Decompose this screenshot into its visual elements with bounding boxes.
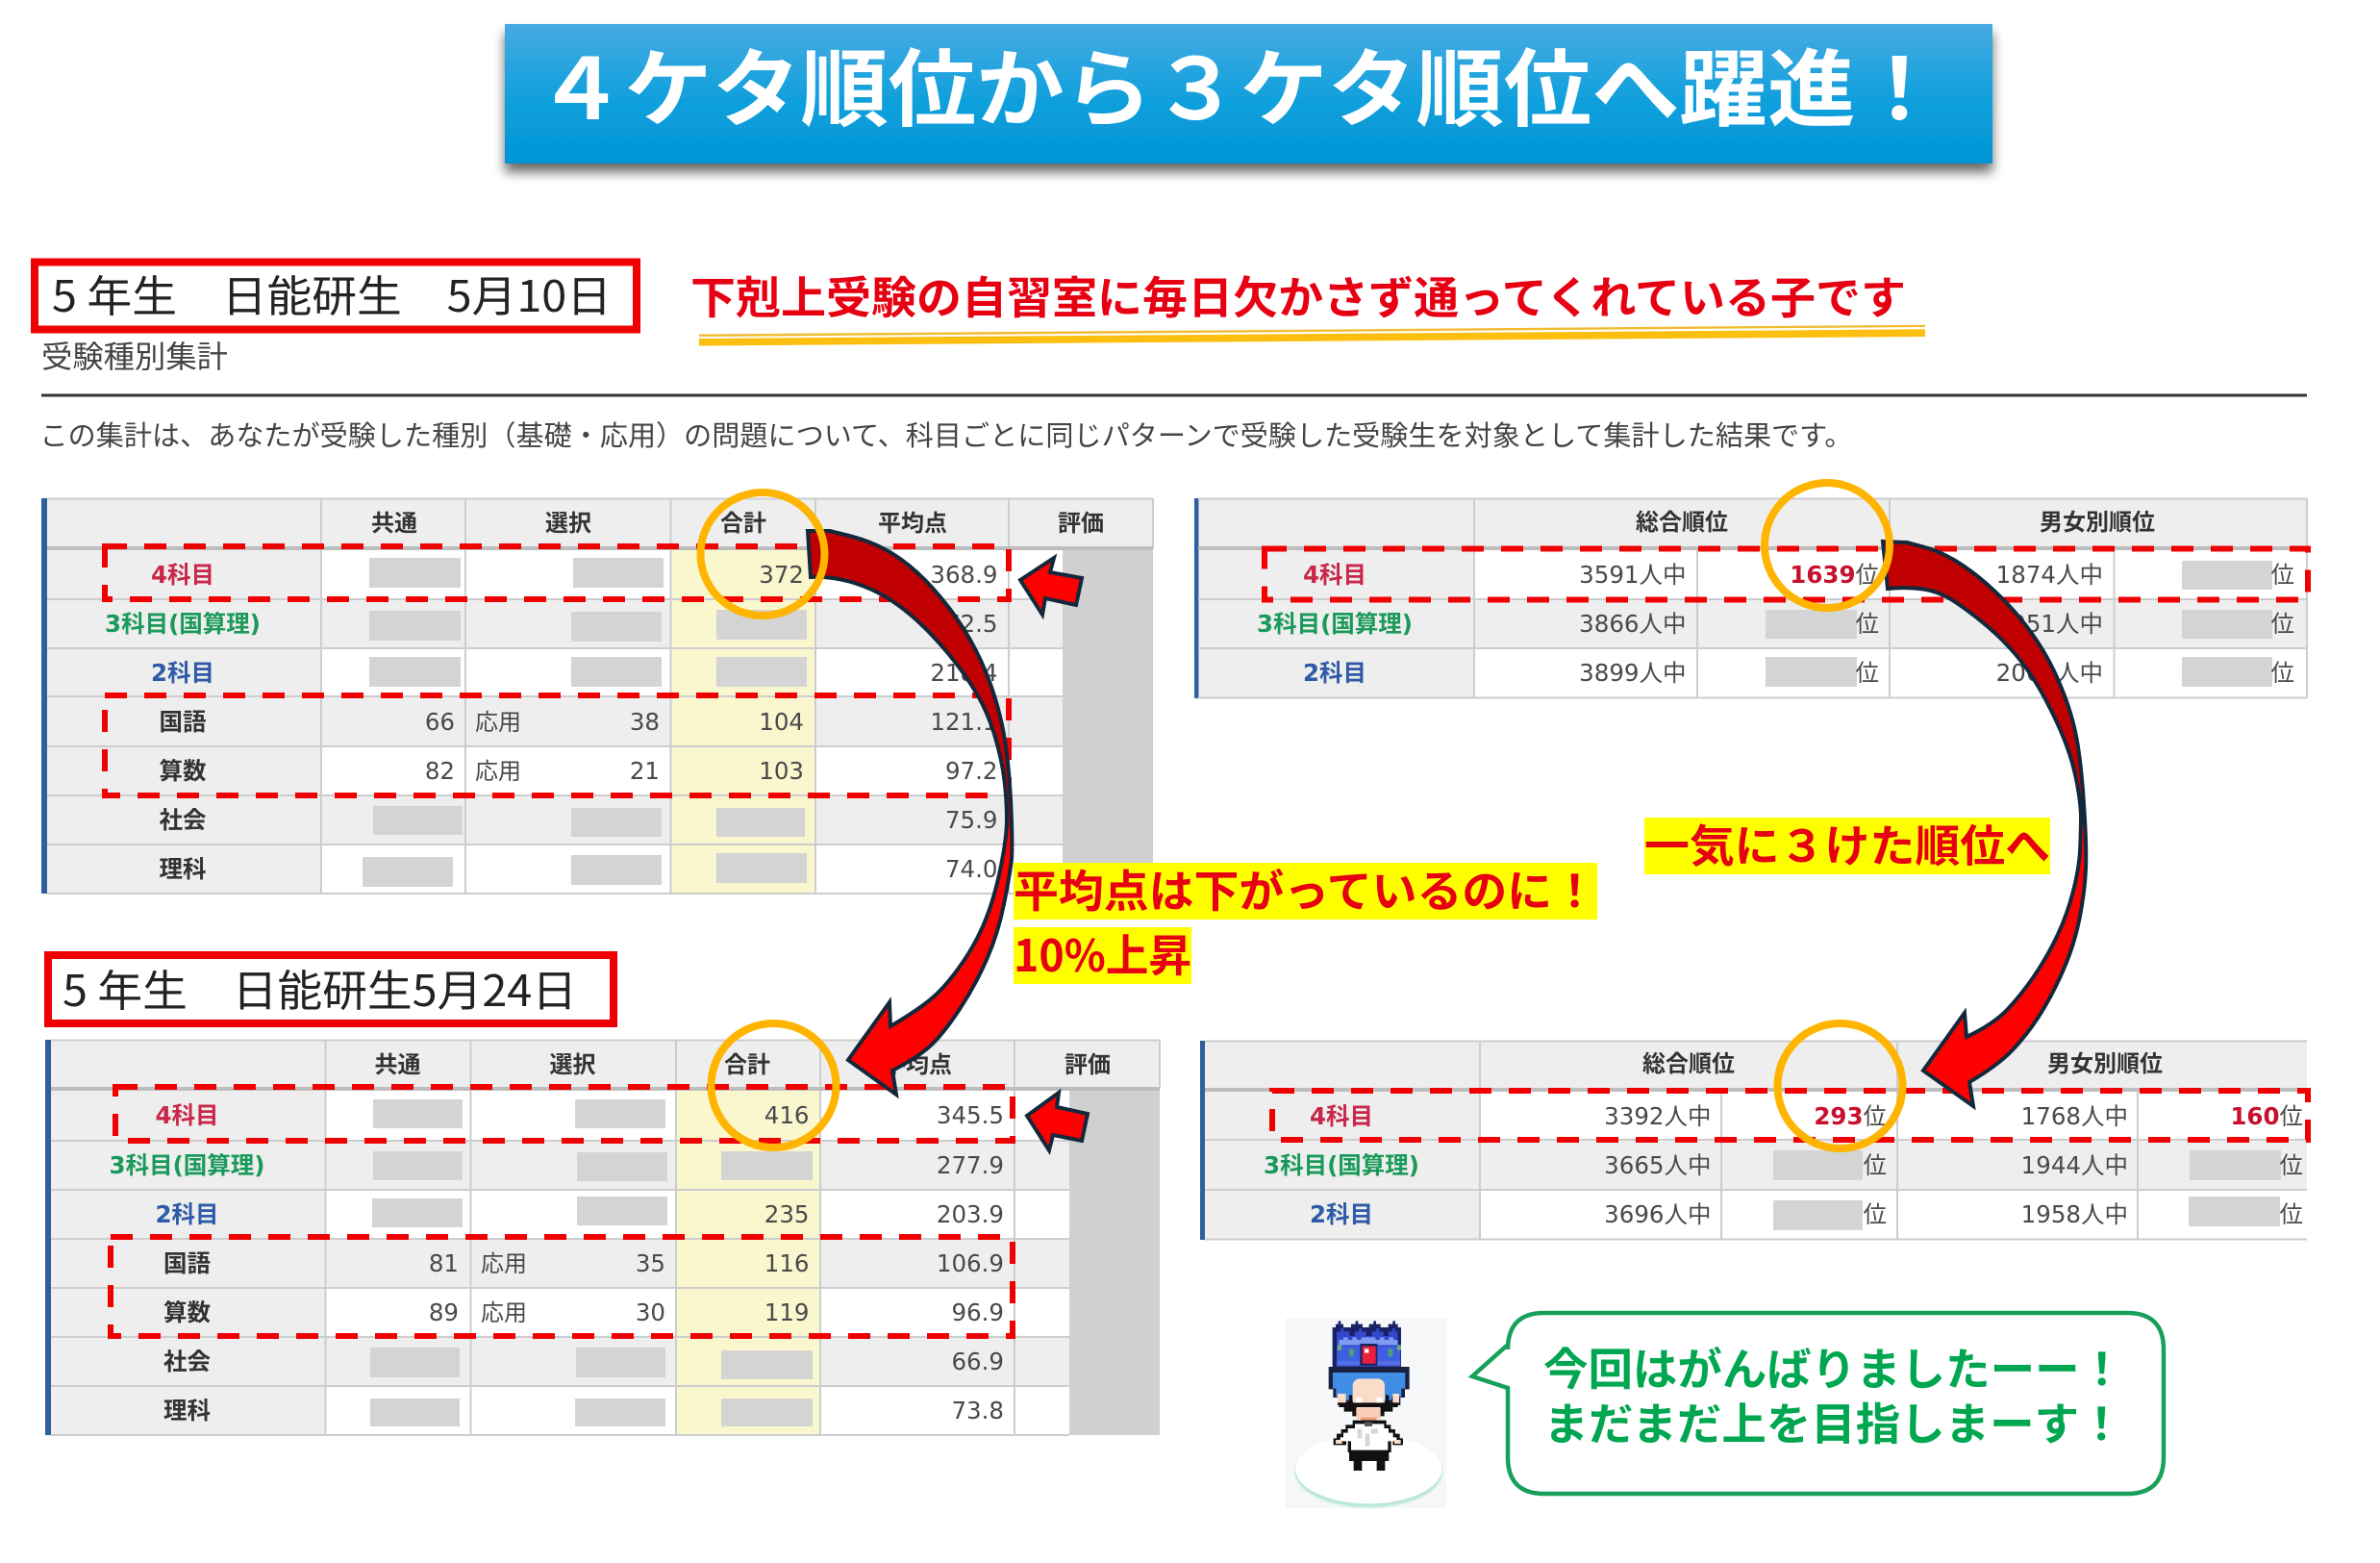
row labels: [105, 561, 261, 883]
header labels: 共通: [371, 504, 417, 538]
header labels: [1642, 1045, 2163, 1078]
rank values: 3696人中: [1604, 1200, 1712, 1228]
callout: average fell: 平均点は下がっているのに！: [1014, 857, 1597, 920]
row labels: 2科目: [1310, 1200, 1373, 1228]
header labels: 共通: [375, 1046, 421, 1079]
row labels: 4科目: [151, 561, 214, 589]
rank values: 1874人中: [1996, 561, 2103, 589]
coat: [1334, 1421, 1403, 1452]
rank values: 位: [1864, 1151, 1887, 1179]
score values: 35: [636, 1249, 665, 1277]
score values: 応用: [481, 1245, 527, 1278]
row labels: 2科目: [155, 1200, 219, 1228]
header labels: [371, 504, 1104, 538]
score values: 116: [764, 1249, 810, 1277]
table: May 24 scores: [45, 1040, 1160, 1435]
rank values: [1604, 1102, 2303, 1228]
score values: 416: [764, 1101, 810, 1129]
score values: [429, 1101, 1004, 1424]
score values: 74.0: [945, 855, 998, 883]
hair: [1329, 1367, 1410, 1405]
rank values: 1944人中: [2021, 1151, 2128, 1179]
rank values: 3392人中: [1604, 1102, 1712, 1130]
header labels: 平均点: [883, 1046, 952, 1079]
rank values: 位: [1856, 610, 1879, 638]
header labels: 平均点: [878, 504, 947, 538]
score values: 277.9: [937, 1151, 1004, 1179]
rank values: 3899人中: [1579, 659, 1687, 687]
header labels: 選択: [550, 1046, 596, 1079]
rank values: 3866人中: [1579, 610, 1687, 638]
row labels: 2科目: [1303, 659, 1366, 687]
rank values: 2061人中: [1996, 659, 2103, 687]
score values: 368.9: [930, 561, 998, 589]
heading box: May 24 exam: 5 年生 日能研生5月24日: [63, 956, 577, 1019]
mascot character: [1286, 1318, 1446, 1508]
score values: 89: [429, 1298, 459, 1326]
score values: 97.2: [945, 757, 998, 785]
orange circle: May 24 total: [712, 1023, 837, 1147]
small arrow: May 24 row: [1027, 1093, 1088, 1150]
score values: 203.9: [937, 1200, 1004, 1228]
speech bubble: [1472, 1313, 2164, 1494]
score values: 272.5: [930, 610, 998, 638]
score values: 96.9: [951, 1298, 1004, 1326]
score values: 81: [429, 1249, 459, 1277]
masked rank blocks: [1766, 561, 2272, 687]
dashed highlight boxes: [105, 546, 2308, 1336]
rank values: 3665人中: [1604, 1151, 1712, 1179]
row labels: 3科目(国算理): [105, 610, 261, 638]
row labels: 3科目(国算理): [1257, 610, 1413, 638]
header labels: 男女別順位: [2047, 1045, 2163, 1078]
header labels: [1636, 503, 2155, 537]
row labels: 4科目: [1303, 561, 1366, 589]
rank values: 位: [2271, 561, 2294, 589]
score values: 218.4: [930, 659, 998, 687]
rank values: 位: [1856, 659, 1879, 687]
score values: 104: [759, 708, 804, 736]
row labels: 3科目(国算理): [1264, 1151, 1419, 1179]
arrow: left score curve: [808, 531, 1012, 1095]
score values: 121.1: [930, 708, 998, 736]
row labels: 国語: [163, 1249, 211, 1277]
orange circle: May 24 rank: [1777, 1023, 1902, 1148]
score values: 345.5: [937, 1101, 1004, 1129]
score values: 235: [764, 1200, 810, 1228]
row labels: [1257, 561, 1413, 687]
rank values: 位: [2271, 610, 2294, 638]
row labels: [1264, 1102, 1419, 1228]
callout: 10 percent up: 10%上昇: [1014, 921, 1191, 985]
rank values: 1768人中: [2021, 1102, 2128, 1130]
row labels: 算数: [160, 757, 207, 785]
row labels: 3科目(国算理): [110, 1151, 264, 1179]
score values: 38: [630, 708, 660, 736]
glasses and beard: [1339, 1395, 1398, 1416]
score values: 21: [630, 757, 660, 785]
row labels: 国語: [160, 708, 206, 736]
rank values: 位: [2279, 1151, 2303, 1179]
score values: 応用: [475, 703, 521, 737]
score values: 103: [759, 757, 804, 785]
table: May 24 ranks: [1200, 1041, 2307, 1240]
speech bubble: まだまだ上を目指しまーす！: [1544, 1390, 2123, 1453]
header labels: 男女別順位: [2040, 503, 2155, 537]
callout: rank jump: 一気に３けた順位へ: [1644, 812, 2050, 875]
small arrow: May 10 row: [1020, 558, 1082, 615]
score values: 応用: [475, 752, 521, 786]
red tagline with underline: 下剋上受験の自習室に毎日欠かさず通ってくれている子です: [690, 264, 1906, 327]
score values: 30: [636, 1298, 665, 1326]
row labels: 4科目: [155, 1101, 219, 1129]
rank values: 1951人中: [1996, 610, 2103, 638]
header labels: 合計: [720, 504, 766, 538]
header labels: 評価: [1058, 504, 1104, 538]
score values: 119: [764, 1298, 810, 1326]
score values: 66: [425, 708, 455, 736]
rank values: 位: [2279, 1200, 2303, 1228]
rank values: 160位: [2230, 1102, 2303, 1130]
score values: 82: [425, 757, 455, 785]
orange circle: May 10 total: [700, 492, 825, 616]
score values: 106.9: [937, 1249, 1004, 1277]
row labels: 理科: [163, 1397, 211, 1424]
row labels: 2科目: [151, 659, 214, 687]
row labels: 社会: [163, 1348, 211, 1375]
title banner: ４ケタ順位から３ケタ順位へ躍進！: [537, 22, 1943, 144]
masked score blocks: [363, 558, 807, 887]
table: May 10 ranks: [1194, 498, 2307, 698]
score values: 73.8: [951, 1397, 1004, 1424]
score values: 75.9: [945, 806, 998, 834]
row labels: 4科目: [1310, 1102, 1373, 1130]
row labels: 理科: [160, 855, 206, 883]
header labels: 評価: [1065, 1046, 1111, 1079]
masked score blocks: [370, 1099, 813, 1426]
row labels: 社会: [160, 806, 207, 834]
heading box: May 10 exam: 5 年生 日能研生 5月10日: [52, 262, 612, 324]
header labels: 総合順位: [1636, 503, 1728, 537]
rank values: 位: [2271, 659, 2294, 687]
rank values: [1579, 561, 2294, 687]
rank values: 1958人中: [2021, 1200, 2128, 1228]
header labels: 合計: [724, 1046, 770, 1079]
row labels: 算数: [163, 1298, 211, 1326]
arrow: right rank curve: [1883, 542, 2086, 1106]
score values: 66.9: [951, 1348, 1004, 1375]
speech bubble: 今回はがんばりましたーー！: [1543, 1335, 2124, 1399]
rank values: 293位: [1814, 1102, 1887, 1130]
rank values: 位: [1864, 1200, 1887, 1228]
masked rank blocks: [1773, 1150, 2281, 1230]
row labels: [110, 1101, 264, 1424]
score values: 372: [759, 561, 804, 589]
header labels: 総合順位: [1642, 1045, 1735, 1078]
score values: 応用: [481, 1294, 527, 1327]
face: [1353, 1378, 1385, 1407]
header labels: 選択: [545, 504, 591, 538]
description text: この集計は、あなたが受験した種別（基礎・応用）の問題について、科目ごとに同じパターンで受験した受験生を対象として集計した結果です。: [40, 414, 1852, 454]
table: May 10 scores: [41, 498, 1153, 894]
crown: [1333, 1321, 1401, 1373]
rank values: 1639位: [1790, 561, 1879, 589]
section heading: 受験種別集計: [41, 333, 228, 377]
legs: [1349, 1450, 1389, 1461]
score values: [425, 561, 998, 883]
rank values: 3591人中: [1579, 561, 1687, 589]
orange circle: May 10 rank: [1765, 483, 1890, 608]
header labels: [375, 1046, 1111, 1079]
